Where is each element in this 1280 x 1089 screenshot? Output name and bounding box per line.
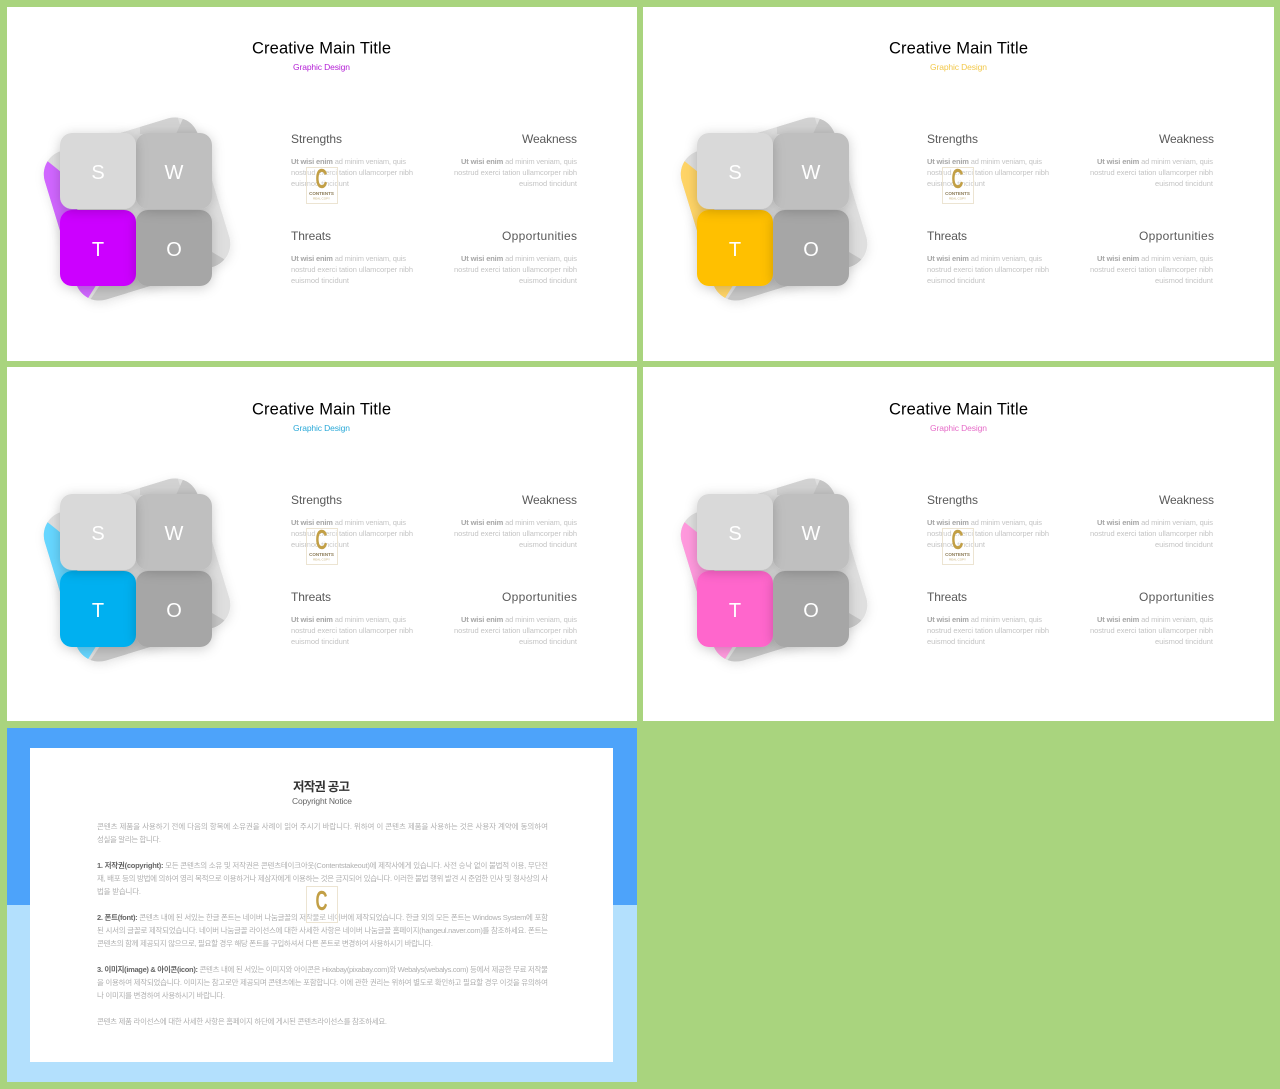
title: Creative Main Title xyxy=(252,40,391,58)
text block: opportunities: euismod tincidunt xyxy=(519,276,578,285)
text block: opportunities: euismod tincidunt xyxy=(1155,637,1214,646)
text block: strengths: Ut wisi enim ad minim veniam, quis xyxy=(927,518,1042,527)
text block: strengths: Ut wisi enim ad minim veniam, quis xyxy=(291,518,406,527)
text block: opportunities: euismod tincidunt xyxy=(519,637,578,646)
SWOT diagram: T xyxy=(729,600,741,622)
text block: weakness: nostrud exerci tation ullamcorper nibh xyxy=(454,168,577,177)
SWOT diagram: S xyxy=(728,523,742,545)
watermark xyxy=(306,524,338,564)
SWOT diagram xyxy=(43,117,233,305)
SWOT diagram: O xyxy=(166,239,182,261)
watermark: REAL COPY xyxy=(313,196,330,200)
text block: opportunities: nostrud exerci tation ullamcorper nibh xyxy=(1090,265,1213,274)
text block: opportunities xyxy=(454,229,578,285)
SWOT diagram: O xyxy=(803,600,819,622)
section 1: copyright: 1. 저작권(copyright): 모든 콘텐츠의 소유 및 저작권은 콘텐츠테이크아웃(Contentstakeout)에 제작사에게 있습니다. 사전 승낙 없이 불법적 이용, 무단전 xyxy=(97,860,548,870)
text block: opportunities: Ut wisi enim ad minim veniam, quis xyxy=(1097,615,1213,624)
watermark: CONTENTS xyxy=(309,191,334,196)
text block: threats: nostrud exerci tation ullamcorper nibh xyxy=(291,626,413,635)
watermark: CONTENTS xyxy=(309,552,334,557)
watermark xyxy=(306,885,338,922)
section 2: font: 콘텐츠의 함께 제공되지 않으므로, 필요할 경우 해당 폰트를 구입하셔서 다른 폰트로 변경하여 사용하시기 바랍니다. xyxy=(97,938,433,948)
text block: opportunities: Opportunities xyxy=(502,590,577,604)
text block: threats: Ut wisi enim ad minim veniam, quis xyxy=(927,615,1042,624)
SWOT diagram: W xyxy=(802,523,821,545)
text block: weakness xyxy=(454,132,578,188)
section 2: font: 된 시서의 글꼴로 제작되었습니다. 네이버 나눔글꼴 라이선스에 대한 사세한 사항은 네이버 나눔글꼴 홈페이지(hangeul.naver.com)를 참조하세요. 폰트는 xyxy=(97,925,548,935)
text block: opportunities xyxy=(1090,229,1214,285)
text block: threats: Ut wisi enim ad minim veniam, quis xyxy=(291,254,406,263)
section 3: image and icon: 나 이미지를 변경하여 사용하시기 바랍니다. xyxy=(97,990,225,1000)
text block: weakness: Ut wisi enim ad minim veniam, quis xyxy=(461,518,577,527)
panel: pink SWOT slide xyxy=(643,367,1274,721)
SWOT diagram: S xyxy=(91,523,105,545)
subtitle: Graphic Design xyxy=(293,423,350,433)
text block: strengths: nostrud exerci tation ullamcorper nibh xyxy=(927,529,1049,538)
section 1: copyright: 법을 받습니다. xyxy=(97,886,141,896)
watermark: REAL COPY xyxy=(313,558,330,562)
text block: strengths xyxy=(927,493,1049,549)
text block: weakness: euismod tincidunt xyxy=(519,540,578,549)
subtitle: Graphic Design xyxy=(293,62,350,72)
text block: opportunities xyxy=(1090,590,1214,646)
panel: purple SWOT slide xyxy=(7,7,637,361)
text block: threats: Ut wisi enim ad minim veniam, quis xyxy=(291,615,406,624)
text block: weakness: nostrud exerci tation ullamcorper nibh xyxy=(1090,529,1213,538)
intro paragraph xyxy=(97,821,548,844)
text block: threats: nostrud exerci tation ullamcorper nibh xyxy=(291,265,413,274)
text block: weakness: nostrud exerci tation ullamcorper nibh xyxy=(1090,168,1213,177)
text block: threats xyxy=(927,229,1049,285)
text block: strengths: nostrud exerci tation ullamcorper nibh xyxy=(291,168,413,177)
watermark: C xyxy=(952,163,964,194)
watermark: C xyxy=(316,163,328,194)
text block: threats: euismod tincidunt xyxy=(927,637,986,646)
text block: weakness xyxy=(454,493,578,549)
text block: weakness: Weakness xyxy=(1159,493,1214,507)
watermark: C xyxy=(316,524,328,555)
SWOT diagram xyxy=(680,117,870,305)
title: Creative Main Title xyxy=(889,400,1028,418)
text block: opportunities: Opportunities xyxy=(1139,229,1214,243)
SWOT diagram: T xyxy=(729,239,741,261)
text block: threats: euismod tincidunt xyxy=(291,637,350,646)
text block: weakness: Weakness xyxy=(1159,132,1214,146)
SWOT diagram: O xyxy=(166,600,182,622)
watermark xyxy=(942,524,974,564)
SWOT diagram: O xyxy=(803,239,819,261)
watermark: CONTENTS xyxy=(945,552,970,557)
text block: opportunities: Ut wisi enim ad minim veniam, quis xyxy=(461,615,577,624)
SWOT diagram: T xyxy=(92,239,104,261)
text block: threats xyxy=(291,229,413,285)
copyright subheading: Copyright Notice xyxy=(292,796,352,806)
text block: strengths xyxy=(291,493,413,549)
text block: threats: Threats xyxy=(291,229,331,243)
text block: strengths: euismod tincidunt xyxy=(927,179,986,188)
watermark xyxy=(942,163,974,204)
text block: strengths: Strengths xyxy=(927,132,978,146)
watermark: CONTENTS xyxy=(945,191,970,196)
section 3: image and icon: 3. 이미지(image) & 아이콘(icon): 콘텐츠 내에 된 서있는 이미지와 아이콘은 Hixabay(pixabay.com)와 Webalys(webalys.com) 등에서 제공한 무료 저작물 xyxy=(97,964,548,974)
text block: threats: Threats xyxy=(291,590,331,604)
closing line: 콘텐츠 제품 라이선스에 대한 사세한 사항은 홈페이지 하단에 게시된 콘텐츠라이선스를 참조하세요. xyxy=(97,1016,387,1026)
SWOT diagram: S xyxy=(728,162,742,184)
text block: strengths: euismod tincidunt xyxy=(927,540,986,549)
SWOT diagram: W xyxy=(165,523,184,545)
text block: threats: Ut wisi enim ad minim veniam, quis xyxy=(927,254,1042,263)
title: Creative Main Title xyxy=(252,400,391,418)
text block: weakness xyxy=(1090,132,1214,188)
text block: opportunities: Opportunities xyxy=(1139,590,1214,604)
text block: strengths: euismod tincidunt xyxy=(291,179,350,188)
title: Creative Main Title xyxy=(889,40,1028,58)
section 1: copyright xyxy=(97,860,548,896)
text block: strengths: euismod tincidunt xyxy=(291,540,350,549)
watermark: C xyxy=(952,524,964,555)
text block: opportunities: Opportunities xyxy=(502,229,577,243)
SWOT diagram: T xyxy=(92,600,104,622)
SWOT diagram xyxy=(680,478,870,666)
text block: threats: euismod tincidunt xyxy=(291,276,350,285)
text block: weakness xyxy=(1090,493,1214,549)
watermark: REAL COPY xyxy=(949,558,966,562)
text block: strengths: Strengths xyxy=(291,132,342,146)
text block: opportunities: nostrud exerci tation ullamcorper nibh xyxy=(1090,626,1213,635)
copyright heading: 저작권 공고 xyxy=(293,779,350,794)
text block: weakness: Weakness xyxy=(522,493,577,507)
text block: opportunities: Ut wisi enim ad minim veniam, quis xyxy=(461,254,577,263)
watermark: C xyxy=(316,885,328,916)
panel: copyright notice xyxy=(7,728,637,1082)
text block: threats: Threats xyxy=(927,590,967,604)
text block: threats: euismod tincidunt xyxy=(927,276,986,285)
text block: weakness: euismod tincidunt xyxy=(1155,179,1214,188)
text block: opportunities: nostrud exerci tation ullamcorper nibh xyxy=(454,265,577,274)
subtitle: Graphic Design xyxy=(930,62,987,72)
text block: threats: Threats xyxy=(927,229,967,243)
watermark: REAL COPY xyxy=(949,196,966,200)
intro paragraph: 콘텐츠 제품을 사용하기 전에 다음의 항목에 소유권을 사례이 읽어 주시기 바랍니다. 위하여 이 콘텐츠 제품을 사용하는 것은 사용자 계약에 동의하여 xyxy=(97,821,548,831)
text block: opportunities: nostrud exerci tation ullamcorper nibh xyxy=(454,626,577,635)
text block: strengths: nostrud exerci tation ullamcorper nibh xyxy=(927,168,1049,177)
text block: strengths: Ut wisi enim ad minim veniam, quis xyxy=(291,157,406,166)
panel: yellow SWOT slide xyxy=(643,7,1274,361)
text block: threats xyxy=(291,590,413,646)
text block: weakness: Weakness xyxy=(522,132,577,146)
SWOT diagram xyxy=(43,478,233,666)
panel: blue SWOT slide xyxy=(7,367,637,721)
watermark xyxy=(306,163,338,204)
text block: strengths: Strengths xyxy=(927,493,978,507)
text block: threats: nostrud exerci tation ullamcorper nibh xyxy=(927,626,1049,635)
SWOT diagram: W xyxy=(165,162,184,184)
text block: weakness: nostrud exerci tation ullamcorper nibh xyxy=(454,529,577,538)
SWOT diagram: S xyxy=(91,162,105,184)
section 3: image and icon xyxy=(97,964,548,1000)
text block: weakness: Ut wisi enim ad minim veniam, quis xyxy=(1097,518,1213,527)
text block: weakness: euismod tincidunt xyxy=(1155,540,1214,549)
section 2: font xyxy=(97,912,548,948)
text block: weakness: Ut wisi enim ad minim veniam, quis xyxy=(1097,157,1213,166)
text block: opportunities: Ut wisi enim ad minim veniam, quis xyxy=(1097,254,1213,263)
intro paragraph: 성실을 알리는 합니다. xyxy=(97,834,161,844)
text block: strengths xyxy=(927,132,1049,188)
section 2: font: 2. 폰트(font): 콘텐츠 내에 된 서있는 한글 폰트는 네이버 나눔글꼴의 저작물로 네이버에 제작되었습니다. 한글 외의 모든 폰트는 Windows System에 포함 xyxy=(97,912,548,922)
SWOT diagram: W xyxy=(802,162,821,184)
text block: opportunities xyxy=(454,590,578,646)
text block: opportunities: euismod tincidunt xyxy=(1155,276,1214,285)
text block: weakness: euismod tincidunt xyxy=(519,179,578,188)
section 1: copyright: 재, 배포 등의 방법에 의하여 영리 목적으로 이용하거나 제삼자에게 이용하는 것은 금지되어 있습니다. 이러한 불법 행위 발견 시 준엄한 민사 및 형사상의 사 xyxy=(97,873,548,883)
section 3: image and icon: 을 이용하여 제작되었습니다. 이미지는 참고로만 제공되며 콘텐츠에는 포함합니다. 이에 관한 권리는 위하여 별도로 확인하고 필요할 경우 이것을 유의하여 xyxy=(97,977,548,987)
text block: strengths: Strengths xyxy=(291,493,342,507)
text block: weakness: Ut wisi enim ad minim veniam, quis xyxy=(461,157,577,166)
subtitle: Graphic Design xyxy=(930,423,987,433)
text block: strengths: nostrud exerci tation ullamcorper nibh xyxy=(291,529,413,538)
text block: strengths xyxy=(291,132,413,188)
text block: threats xyxy=(927,590,1049,646)
text block: strengths: Ut wisi enim ad minim veniam, quis xyxy=(927,157,1042,166)
text block: threats: nostrud exerci tation ullamcorper nibh xyxy=(927,265,1049,274)
